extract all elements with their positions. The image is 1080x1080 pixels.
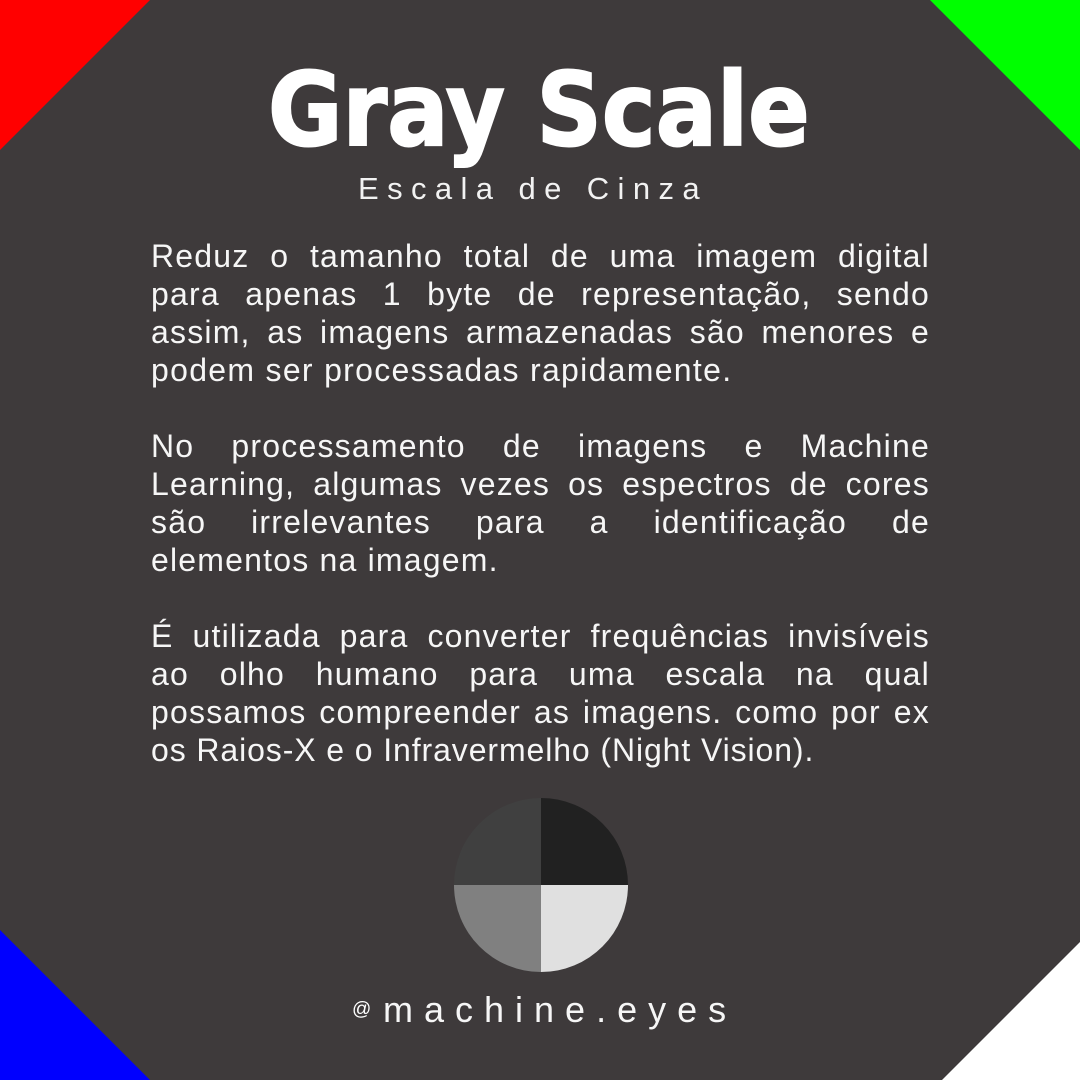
text block: paragraph 2: imagens [578,428,707,464]
text block: paragraph 3: imagens. [583,694,722,730]
text block: paragraph 1: menores [761,314,894,350]
text block: paragraph 1: digital [838,238,930,274]
text block: paragraph 1: apenas [245,276,357,312]
icon: blue corner [0,930,150,1080]
icon: green corner [930,0,1080,150]
text block: paragraph 1: byte [427,276,492,312]
text block: paragraph 2: de [790,466,828,502]
text block: paragraph 1: tamanho [310,238,443,274]
text block: paragraph 1: são [690,314,745,350]
icon: red corner [0,0,150,150]
text block: paragraph 2: elementos na imagem. [151,542,499,578]
text block: paragraph 1: sendo [837,276,930,312]
text block: paragraph 3: frequências [591,618,769,654]
text block: paragraph 3: como [735,694,818,730]
handle: @ [352,999,371,1020]
text block: paragraph 3: olho [220,656,285,692]
text block: paragraph 2: para [476,504,545,540]
text block: paragraph 1: de [518,276,556,312]
text block: paragraph 2: são [151,504,206,540]
text block: paragraph 2: espectros [622,466,772,502]
text block: paragraph 2: No [151,428,194,464]
text block: paragraph 2: a [590,504,609,540]
text block: paragraph 1 [151,238,930,388]
text block: paragraph 1: representação, [581,276,811,312]
text block: paragraph 2: Learning, [151,466,295,502]
text block: paragraph 2: irrelevantes [251,504,431,540]
text block: paragraph 1: armazenadas [466,314,673,350]
handle: machine.eyes [383,989,737,1030]
text block: paragraph 2: algumas [313,466,443,502]
text block: paragraph 2 [151,428,930,578]
text block: paragraph 2: de [503,428,541,464]
text block: paragraph 3: para [469,656,538,692]
text block: paragraph 3: na [796,656,834,692]
text block: paragraph 3: utilizada [192,618,321,654]
text block: paragraph 1: podem ser processadas rapidamente. [151,352,732,388]
text block: paragraph 2: os [568,466,604,502]
text block: paragraph 1: 1 [383,276,402,312]
text block: paragraph 3: qual [865,656,930,692]
text block: paragraph 1: assim, [151,314,251,350]
text block: paragraph 3: humano [316,656,439,692]
text block: paragraph 2: e [744,428,764,464]
text block: paragraph 1: as [267,314,303,350]
text block: paragraph 1: uma [610,238,675,274]
text block: paragraph 3: compreender [319,694,521,730]
text block: paragraph 2: processamento [231,428,466,464]
text block: paragraph 2: cores [846,466,930,502]
text block: paragraph 1: o [270,238,289,274]
text block: paragraph 3: invisíveis [788,618,930,654]
text block: paragraph 1: e [911,314,930,350]
icon: grayscale circle [454,798,628,972]
icon: white corner [942,942,1080,1080]
text block: paragraph 3: os Raios-X e o Infravermelho (Night Vision). [151,732,814,768]
text block: paragraph 3: ex [894,694,930,730]
text block: paragraph 3 [151,618,930,768]
text block: paragraph 1: de [551,238,589,274]
text block: paragraph 1: total [464,238,530,274]
title: Gray Scale [268,51,810,170]
text block: paragraph 3: possamos [151,694,306,730]
text block: paragraph 1: Reduz [151,238,250,274]
text block: paragraph 3: escala [665,656,765,692]
text block: paragraph 2: identificação [654,504,847,540]
text block: paragraph 3: as [534,694,570,730]
text block: paragraph 3: É [151,618,174,654]
text block: paragraph 1: imagem [696,238,817,274]
text block: paragraph 3: ao [151,656,189,692]
text block: paragraph 3: por [831,694,881,730]
text block: paragraph 2: Machine [801,428,930,464]
text block: paragraph 2: de [892,504,930,540]
text block: paragraph 3: converter [427,618,572,654]
text block: paragraph 1: para [151,276,220,312]
text block: paragraph 3: uma [569,656,635,692]
text block: paragraph 1: imagens [320,314,449,350]
text block: paragraph 3: para [340,618,408,654]
subtitle: Escala de Cinza [358,171,708,206]
text block: paragraph 2: vezes [461,466,550,502]
